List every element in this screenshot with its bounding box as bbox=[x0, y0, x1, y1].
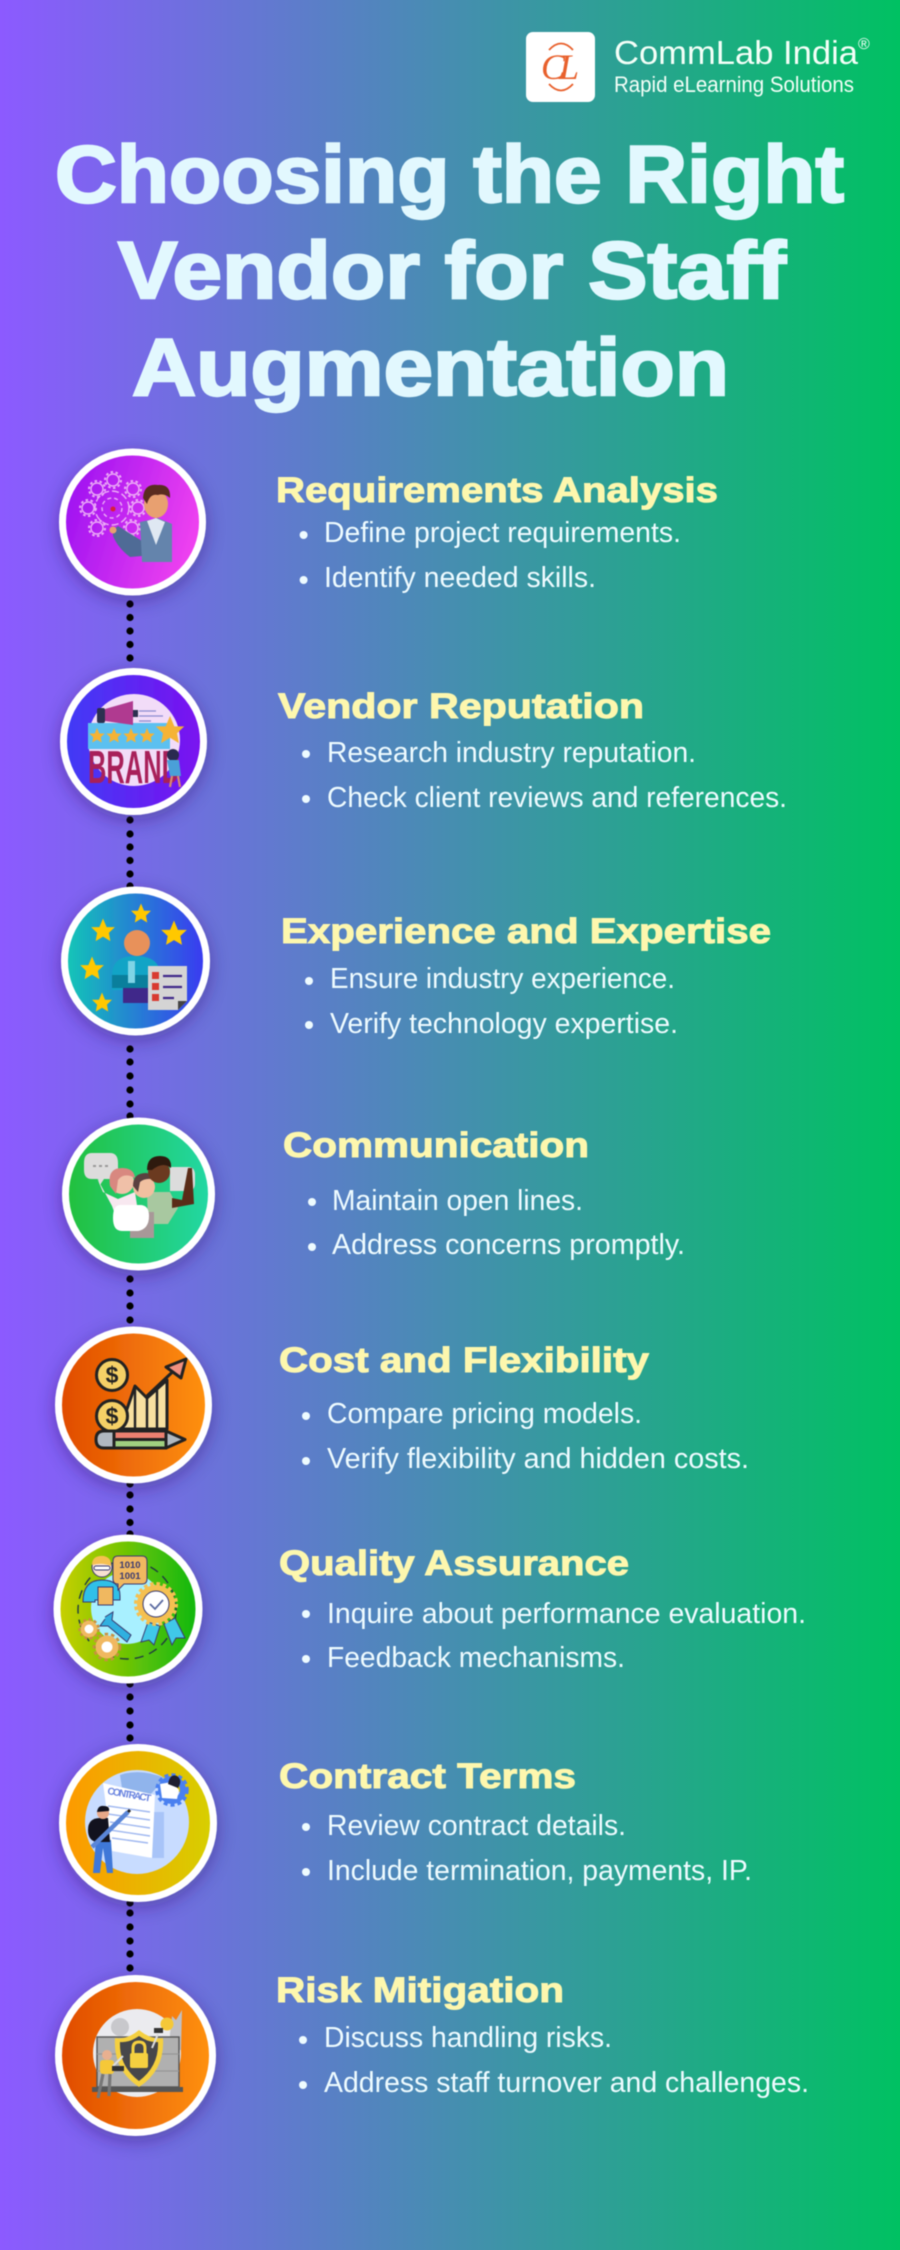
heading: Communication bbox=[283, 1126, 589, 1165]
bullet list: Verify technology expertise. bbox=[330, 1008, 678, 1040]
logo badge: C bbox=[541, 47, 566, 87]
icon: engineer with quality badge bbox=[57, 1538, 199, 1680]
icon: coins, chart and pencil: $ bbox=[106, 1403, 119, 1429]
bullet list: Verify flexibility and hidden costs. bbox=[327, 1443, 749, 1475]
bullet list: Research industry reputation. bbox=[327, 737, 696, 769]
section: Requirements Analysis bbox=[62, 452, 718, 594]
heading: Risk Mitigation bbox=[276, 1971, 564, 2010]
bullet list: Discuss handling risks. bbox=[324, 2022, 612, 2054]
bullet list: Review contract details. bbox=[327, 1810, 626, 1842]
bullet list bbox=[299, 2022, 809, 2099]
logo registered mark: ® bbox=[858, 36, 870, 53]
title: Choosing the Right bbox=[55, 130, 844, 220]
heading: Vendor Reputation bbox=[278, 687, 644, 726]
section: Communication bbox=[66, 1121, 685, 1267]
bullet list bbox=[302, 737, 787, 814]
logo badge: L bbox=[558, 47, 579, 87]
bullet list bbox=[308, 1185, 685, 1261]
icon: man with analysis gears bbox=[62, 452, 202, 592]
bullet list bbox=[305, 963, 678, 1040]
icon: coins, chart and pencil: $ bbox=[106, 1362, 119, 1388]
icon: engineer with quality badge: 1010 bbox=[119, 1560, 141, 1571]
icon: brand rating: BRAND bbox=[88, 741, 180, 793]
title: Augmentation bbox=[132, 323, 729, 413]
bullet list: Feedback mechanisms. bbox=[327, 1642, 625, 1674]
icon: brand rating bbox=[64, 672, 204, 812]
icon: coins, chart and pencil bbox=[58, 1330, 208, 1480]
icon: contract signing bbox=[62, 1748, 214, 1898]
bullet list: Include termination, payments, IP. bbox=[327, 1855, 752, 1887]
icon: contract signing: CONTRACT bbox=[106, 1786, 152, 1805]
section: Cost and Flexibility bbox=[58, 1330, 749, 1480]
heading: Cost and Flexibility bbox=[279, 1341, 650, 1380]
title: Vendor for Staff bbox=[118, 226, 787, 316]
logo badge bbox=[526, 32, 595, 102]
bullet list: Identify needed skills. bbox=[324, 562, 596, 594]
bullet list: Compare pricing models. bbox=[327, 1398, 642, 1430]
section: Risk Mitigation bbox=[58, 1971, 809, 2132]
bullet list: Define project requirements. bbox=[324, 517, 681, 549]
logo tagline: Rapid eLearning Solutions bbox=[614, 72, 854, 97]
bullet list bbox=[302, 1598, 806, 1674]
bullet list: Maintain open lines. bbox=[332, 1185, 583, 1217]
icon: security shield on laptop bbox=[58, 1978, 212, 2132]
icon: engineer with quality badge: 1001 bbox=[119, 1571, 141, 1582]
bullet list bbox=[302, 1398, 749, 1475]
section: Vendor Reputation bbox=[64, 672, 787, 814]
heading: Contract Terms bbox=[279, 1757, 576, 1796]
heading: Requirements Analysis bbox=[276, 471, 718, 510]
icon: expert with stars and resume bbox=[64, 890, 206, 1032]
heading: Quality Assurance bbox=[279, 1544, 629, 1583]
bullet list bbox=[300, 517, 681, 594]
title bbox=[55, 130, 844, 413]
section: Contract Terms bbox=[62, 1748, 752, 1898]
logo name: CommLab India bbox=[614, 34, 859, 71]
dotted connector line bbox=[126, 600, 134, 1972]
logo: CommLab India bbox=[526, 32, 870, 102]
bullet list bbox=[302, 1810, 752, 1887]
icon: people talking bbox=[66, 1121, 212, 1267]
section: Experience and Expertise bbox=[64, 890, 771, 1040]
bullet list: Check client reviews and references. bbox=[327, 782, 787, 814]
heading: Experience and Expertise bbox=[281, 912, 771, 951]
bullet list: Ensure industry experience. bbox=[330, 963, 675, 995]
bullet list: Address staff turnover and challenges. bbox=[324, 2067, 809, 2099]
bullet list: Inquire about performance evaluation. bbox=[327, 1598, 806, 1630]
bullet list: Address concerns promptly. bbox=[332, 1229, 685, 1261]
section: Quality Assurance bbox=[57, 1538, 806, 1680]
